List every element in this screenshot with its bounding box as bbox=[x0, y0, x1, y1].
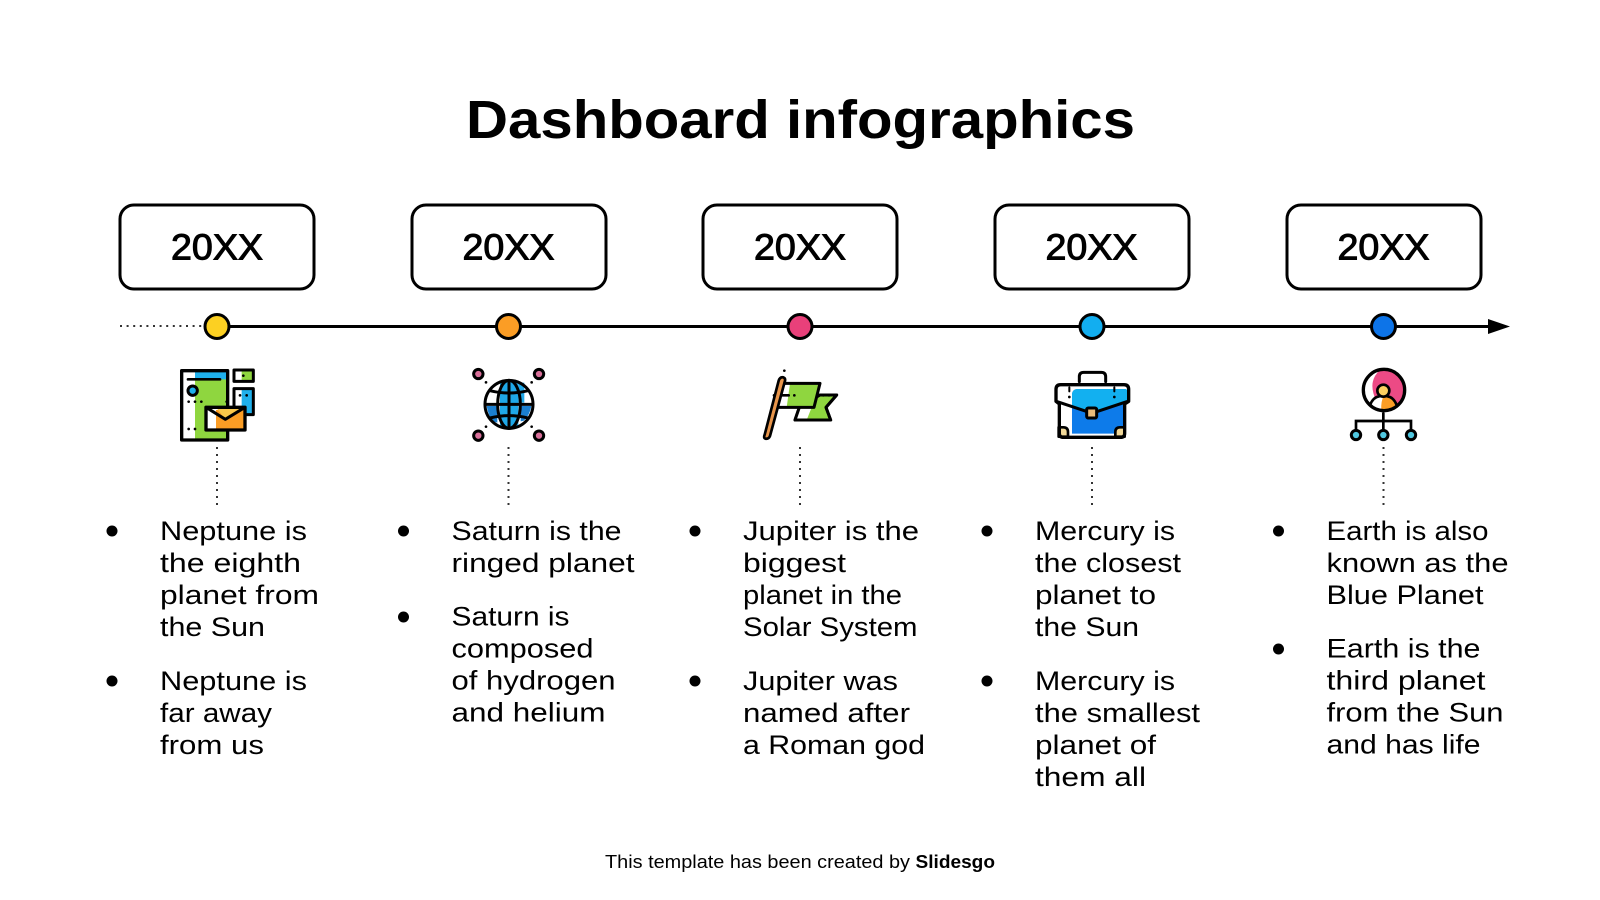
year box 3 bbox=[703, 205, 897, 289]
year box 5 bbox=[1287, 205, 1481, 289]
text block: Mercury: Mercury is bbox=[1035, 666, 1175, 696]
text block: Neptune bbox=[106, 516, 319, 760]
icon: user hierarchy bbox=[1351, 369, 1416, 440]
year box 5: 20XX bbox=[1338, 226, 1430, 268]
footer credit: This template has been created by bbox=[605, 851, 911, 872]
dotted connector lines bbox=[217, 447, 1384, 506]
year box 3: 20XX bbox=[754, 226, 846, 268]
text block: Saturn: of hydrogen bbox=[452, 666, 616, 696]
text block: Earth: Earth is the bbox=[1326, 634, 1480, 664]
text block: Mercury: planet to bbox=[1035, 580, 1156, 610]
text block: Jupiter: biggest bbox=[743, 548, 847, 578]
text block: Jupiter: named after bbox=[743, 698, 910, 728]
text block: Mercury: planet of bbox=[1035, 730, 1157, 760]
text block: Neptune: planet from bbox=[160, 580, 319, 610]
text block: Mercury: the closest bbox=[1035, 548, 1182, 578]
year box 2: 20XX bbox=[462, 226, 554, 268]
text block: Jupiter: planet in the bbox=[743, 580, 902, 610]
timeline with arrow and milestone dots bbox=[120, 314, 1510, 338]
text block: Earth: Earth is also bbox=[1326, 516, 1488, 546]
year box 1: 20XX bbox=[171, 226, 263, 268]
text block: Saturn: and helium bbox=[452, 698, 606, 728]
text block: Jupiter: a Roman god bbox=[743, 730, 925, 760]
text block: Jupiter bbox=[690, 516, 925, 760]
year box 4: 20XX bbox=[1046, 226, 1138, 268]
text block: Earth bbox=[1273, 516, 1508, 760]
text block: Saturn: Saturn is bbox=[452, 602, 570, 632]
year box 4 bbox=[995, 205, 1189, 289]
text block: Neptune: far away bbox=[160, 698, 273, 728]
text block: Neptune: Neptune is bbox=[160, 516, 307, 546]
text block: Neptune: from us bbox=[160, 730, 264, 760]
text block: Saturn: composed bbox=[452, 634, 594, 664]
text block: Mercury bbox=[982, 516, 1201, 792]
text block: Earth: and has life bbox=[1326, 730, 1480, 760]
text block: Jupiter: Solar System bbox=[743, 612, 918, 642]
icon: globe network bbox=[474, 369, 544, 440]
text block: Earth: third planet bbox=[1326, 666, 1486, 696]
text block: Earth: Blue Planet bbox=[1326, 580, 1484, 610]
year box 2 bbox=[412, 205, 606, 289]
text block: Mercury: Mercury is bbox=[1035, 516, 1175, 546]
text block: Mercury: them all bbox=[1035, 762, 1146, 792]
text block: Mercury: the smallest bbox=[1035, 698, 1201, 728]
text block: Neptune: the eighth bbox=[160, 548, 301, 578]
text block: Jupiter: Jupiter was bbox=[743, 666, 898, 696]
icon: document and envelope bbox=[182, 370, 253, 440]
text block: Jupiter: Jupiter is the bbox=[743, 516, 919, 546]
text block: Neptune: Neptune is bbox=[160, 666, 307, 696]
text block: Neptune: the Sun bbox=[160, 612, 265, 642]
footer credit: Slidesgo bbox=[916, 851, 995, 872]
text block: Saturn: Saturn is the bbox=[452, 516, 622, 546]
text block: Saturn: ringed planet bbox=[452, 548, 635, 578]
text block: Earth: from the Sun bbox=[1326, 698, 1504, 728]
year box 1 bbox=[120, 205, 314, 289]
text block: Earth: known as the bbox=[1326, 548, 1508, 578]
text block: Saturn bbox=[398, 516, 635, 728]
text block: Mercury: the Sun bbox=[1035, 612, 1139, 642]
icon: flag bbox=[764, 369, 837, 439]
icon: briefcase bbox=[1056, 372, 1129, 437]
title: Dashboard infographics bbox=[466, 90, 1135, 150]
